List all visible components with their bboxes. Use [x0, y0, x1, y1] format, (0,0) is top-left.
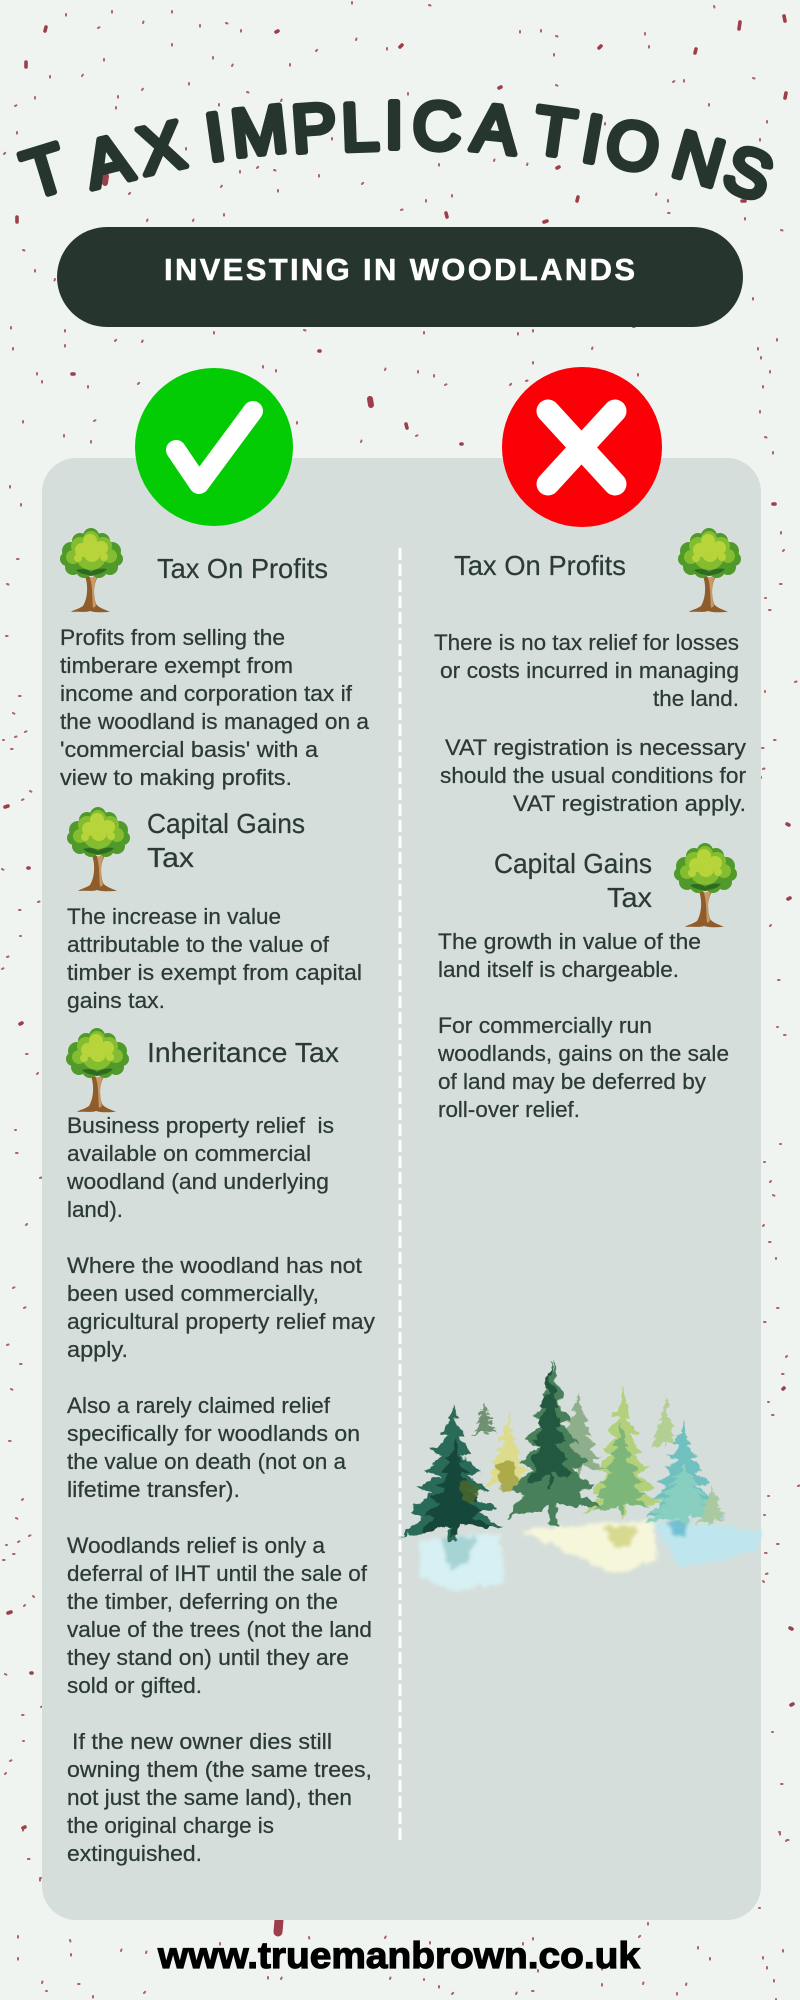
- text block: inheritance tax: deferral of IHT until the sale of: [67, 1561, 368, 1586]
- text block: growth in value: The growth in value of the: [438, 929, 701, 954]
- heading: capital gains right: Capital Gains: [494, 848, 652, 879]
- title: A: [469, 90, 521, 169]
- text block: vat registration: VAT registration apply.: [513, 791, 746, 816]
- heading: capital gains right: Tax: [607, 882, 652, 913]
- text block: roll-over relief: For commercially run: [438, 1013, 652, 1038]
- text block: vat registration: should the usual conditions for: [440, 763, 746, 788]
- text block: profits exempt: view to making profits.: [60, 765, 292, 790]
- main panel: [42, 458, 761, 1920]
- text block: roll-over relief: [437, 1013, 729, 1122]
- text block: inheritance tax: Business property relief is: [67, 1113, 334, 1138]
- text block: inheritance tax: owning them (the same trees,: [67, 1757, 372, 1782]
- title: T: [529, 93, 580, 172]
- text block: profits exempt: [60, 625, 370, 790]
- title: I: [385, 88, 403, 163]
- subtitle banner: [57, 227, 743, 327]
- text block: inheritance tax: agricultural property relief may: [67, 1309, 375, 1334]
- text block: no tax relief: There is no tax relief for losses: [434, 630, 739, 655]
- text block: profits exempt: Profits from selling the: [60, 625, 285, 650]
- text block: inheritance tax: available on commercial: [67, 1141, 311, 1166]
- title: A: [78, 120, 139, 203]
- subtitle banner: INVESTING IN WOODLANDS: [164, 252, 635, 287]
- text block: inheritance tax: the original charge is: [67, 1813, 274, 1838]
- title: P: [289, 90, 339, 167]
- heading: tax on profits left: Tax On Profits: [157, 553, 328, 584]
- text block: profits exempt: timberare exempt from: [60, 653, 293, 678]
- text block: inheritance tax: [66, 1113, 375, 1866]
- title: N: [665, 117, 732, 202]
- text block: growth in value: land itself is chargeable.: [438, 957, 679, 982]
- text block: roll-over relief: roll-over relief.: [438, 1097, 580, 1122]
- icon: green check: [135, 368, 293, 526]
- website url: www.truemanbrown.co.uk: [157, 1935, 640, 1976]
- text block: profits exempt: income and corporation tax if: [60, 681, 353, 706]
- text block: inheritance tax: lifetime transfer).: [67, 1477, 240, 1502]
- icon: tree, capital gains left: [67, 807, 130, 891]
- icon: red cross: [502, 367, 662, 527]
- text block: inheritance tax: apply.: [67, 1337, 128, 1362]
- heading: tax on profits right: Tax On Profits: [454, 550, 626, 581]
- text block: inheritance tax: not just the same land), then: [67, 1785, 352, 1810]
- text block: capital gains exempt: gains tax.: [67, 988, 165, 1013]
- text block: roll-over relief: woodlands, gains on the sale: [437, 1041, 729, 1066]
- text block: inheritance tax: specifically for woodlands on: [67, 1421, 360, 1446]
- icon: tree, tax on profits right: [678, 528, 741, 612]
- text block: capital gains exempt: attributable to the value of: [67, 932, 330, 957]
- title: O: [599, 104, 666, 189]
- title: S: [715, 131, 782, 216]
- text block: capital gains exempt: timber is exempt from capital: [67, 960, 362, 985]
- heading: capital gains left: [147, 808, 305, 873]
- text block: inheritance tax: the value on death (not on a: [67, 1449, 347, 1474]
- text block: no tax relief: [434, 630, 739, 711]
- title: L: [340, 89, 380, 166]
- heading: inheritance tax: Inheritance Tax: [147, 1037, 339, 1068]
- text block: vat registration: VAT registration is necessary: [445, 735, 746, 760]
- text block: roll-over relief: of land may be deferred by: [438, 1069, 706, 1094]
- dashed column divider: [398, 548, 402, 1840]
- title: C: [411, 88, 462, 165]
- title: [14, 88, 782, 216]
- text block: inheritance tax: they stand on) until they are: [67, 1645, 349, 1670]
- title: I: [577, 101, 608, 178]
- title: M: [227, 91, 291, 172]
- text block: profits exempt: 'commercial basis' with a: [60, 737, 319, 762]
- icon: tree, capital gains right: [674, 843, 737, 927]
- text block: growth in value: [438, 929, 701, 982]
- text block: inheritance tax: Where the woodland has not: [67, 1253, 362, 1278]
- text block: inheritance tax: Woodlands relief is only a: [67, 1533, 326, 1558]
- text block: inheritance tax: sold or gifted.: [67, 1673, 202, 1698]
- title: T: [14, 130, 75, 213]
- text block: no tax relief: the land.: [653, 686, 739, 711]
- title: X: [132, 107, 191, 190]
- text block: capital gains exempt: [67, 904, 362, 1013]
- text block: inheritance tax: If the new owner dies still: [72, 1729, 332, 1754]
- icon: tree, inheritance tax: [66, 1028, 129, 1112]
- heading: capital gains left: Capital Gains: [147, 808, 305, 839]
- text block: inheritance tax: extinguished.: [67, 1841, 202, 1866]
- text block: no tax relief: or costs incurred in managing: [440, 658, 739, 683]
- text block: profits exempt: the woodland is managed on a: [60, 709, 370, 734]
- illustration: watercolour forest: [402, 1360, 760, 1592]
- text block: inheritance tax: the timber, deferring on the: [67, 1589, 338, 1614]
- text block: inheritance tax: woodland (and underlying: [66, 1169, 329, 1194]
- text block: inheritance tax: value of the trees (not the land: [67, 1617, 372, 1642]
- icon: tree, tax on profits left: [60, 528, 123, 612]
- text block: inheritance tax: Also a rarely claimed relief: [67, 1393, 331, 1418]
- text block: inheritance tax: been used commercially,: [67, 1281, 319, 1306]
- heading: capital gains left: Tax: [147, 842, 194, 873]
- text block: vat registration: [440, 735, 746, 816]
- text block: capital gains exempt: The increase in value: [67, 904, 281, 929]
- title: I: [201, 99, 230, 176]
- text block: inheritance tax: land).: [67, 1197, 123, 1222]
- heading: capital gains right: [494, 848, 652, 913]
